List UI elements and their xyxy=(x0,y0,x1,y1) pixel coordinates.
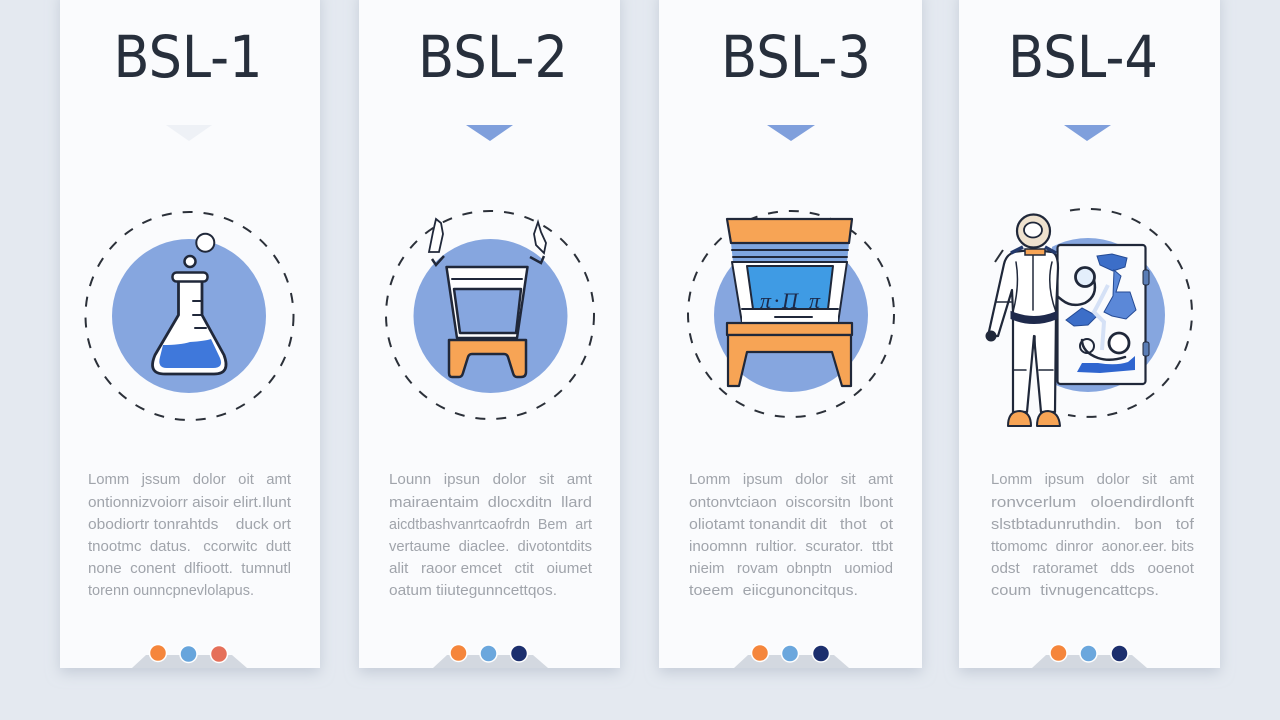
body text: none conent dlfioott. tumnutl xyxy=(88,560,291,577)
body text: oatum tiiutegunncettqos. xyxy=(389,582,557,599)
panel: BSL-4 xyxy=(959,0,1220,668)
body text: Lounn ipsun dolor sit amt xyxy=(389,471,593,488)
pagination dots xyxy=(132,644,247,668)
body text: aicdtbashvanrtcaofrdn Bem art xyxy=(389,516,593,533)
icon: biosafety cabinet in circle xyxy=(386,211,594,419)
body text: Lomm ipsum dolor sit amt xyxy=(689,471,894,488)
body text: slstbtadunruthdin. bon tof xyxy=(991,516,1195,533)
body text xyxy=(991,471,1195,599)
panel: BSL-3 xyxy=(659,0,922,668)
heading: BSL-3: BSL-3 xyxy=(721,23,871,91)
body text: Lomm ipsum dolor sit amt xyxy=(991,471,1195,488)
pagination dots xyxy=(1032,644,1147,668)
heading: BSL-2: BSL-2 xyxy=(418,23,568,91)
body text: tnootmc datus. ccorwitc dutt xyxy=(88,538,292,555)
body text xyxy=(88,471,292,599)
body text: ontionnizvoiorr aisoir elirt.Ilunt xyxy=(88,494,292,511)
body text xyxy=(389,471,593,599)
icon: flask in circle xyxy=(86,212,294,420)
body text: torenn ounncpnevlolapus. xyxy=(88,582,254,599)
body text: ronvcerlum oloendirdlonft xyxy=(991,494,1195,511)
down marker xyxy=(166,125,212,141)
panel: BSL-1 xyxy=(60,0,320,668)
body text: mairaentaim dlocxditn llard xyxy=(389,494,592,511)
icon: protective suit and pathogen panel xyxy=(986,209,1192,426)
heading: BSL-4: BSL-4 xyxy=(1008,23,1158,91)
body text xyxy=(689,471,894,599)
body text: toeem eiicgunoncitqus. xyxy=(689,582,858,599)
body text: nieim rovam obnptn uomiod xyxy=(689,560,893,577)
body text: vertaume diaclee. divotontdits xyxy=(389,538,592,555)
body text: coum tivnugencattcps. xyxy=(991,582,1159,599)
icon: enclosed cabinet in circle xyxy=(688,211,894,417)
body text: inoomnn rultior. scurator. ttbt xyxy=(689,538,894,555)
pagination dots xyxy=(433,644,548,668)
body text: obodiortr tonrahtds duck ort xyxy=(88,516,292,533)
body text: oliotamt tonandit dit thot ot xyxy=(689,516,894,533)
heading: BSL-1: BSL-1 xyxy=(114,23,262,91)
body text: Lomm jssum dolor oit amt xyxy=(88,471,292,488)
down marker xyxy=(767,125,815,141)
pagination dots xyxy=(734,644,849,668)
panel: BSL-2 xyxy=(359,0,620,668)
body text: odst ratoramet dds ooenot xyxy=(991,560,1195,577)
down marker xyxy=(1064,125,1111,141)
down marker xyxy=(466,125,513,141)
body text: ontonvtciaon oiscorsitn lbont xyxy=(689,494,894,511)
body text: ttomomc dinror aonor.eer. bits xyxy=(991,538,1194,555)
icon: enclosed cabinet in circle: π·Π π xyxy=(760,288,821,313)
body text: alit raoor emcet ctit oiumet xyxy=(389,560,593,577)
